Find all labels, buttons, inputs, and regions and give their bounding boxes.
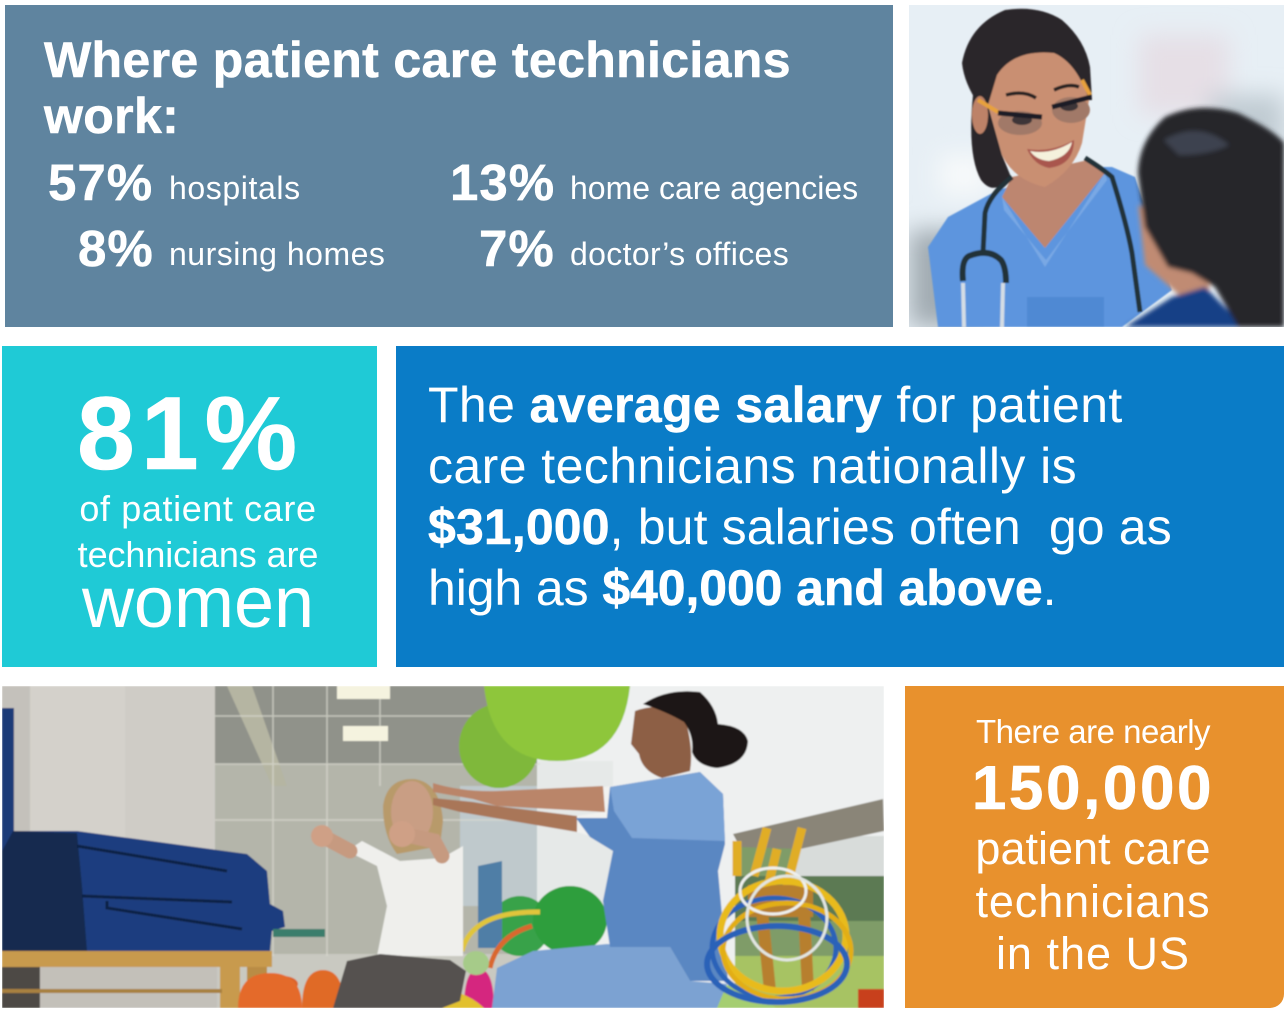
- caption: of patient care: [79, 488, 317, 529]
- stat: home care agencies: home care agencies: [570, 170, 858, 206]
- stat: doctors offices: doctor’s offices: [570, 236, 789, 272]
- caption: technicians are: [78, 534, 318, 575]
- stat: doctors offices: 7%: [479, 220, 555, 277]
- caption: patient care: [975, 823, 1211, 874]
- big number: 150,000: [972, 754, 1214, 823]
- room background: [2, 686, 884, 1008]
- heading: [44, 32, 791, 144]
- stat: nursing homes: nursing homes: [169, 236, 385, 272]
- window and landscape: [733, 799, 884, 1008]
- salary text: care technicians nationally is: [428, 438, 1077, 494]
- caption: [78, 488, 318, 575]
- heading: work:: [44, 88, 179, 144]
- salary text: $31,000, but salaries often go as: [428, 499, 1172, 555]
- stat: home care agencies: 13%: [450, 154, 555, 211]
- orange, yellow and pink balls: [238, 951, 884, 1008]
- heading: Where patient care technicians: [44, 32, 791, 88]
- salary text: The average salary for patient: [428, 377, 1123, 433]
- panel: where technicians work: [5, 5, 893, 327]
- salary text: high as $40,000 and above.: [428, 560, 1056, 616]
- caption: technicians: [975, 876, 1211, 926]
- intro line: There are nearly: [976, 713, 1210, 750]
- stacked blue mats on bench: [2, 708, 325, 1008]
- stat: hospitals: 57%: [48, 154, 153, 211]
- panel: 81 percent women: [2, 346, 377, 667]
- panel: 150,000 technicians: [905, 686, 1284, 1008]
- nurse: [928, 9, 1172, 327]
- panel: average salary: [396, 346, 1284, 667]
- caption: in the US: [996, 928, 1190, 979]
- stat: home care agencies: [450, 154, 858, 211]
- stat: nursing homes: 8%: [78, 220, 154, 277]
- photo: smiling technician: [909, 5, 1284, 327]
- photo: therapy session: [2, 686, 884, 1008]
- salary text: [428, 377, 1172, 616]
- stat: nursing homes: [78, 220, 385, 277]
- patient from behind: [1125, 108, 1284, 327]
- stat: hospitals: hospitals: [169, 170, 301, 206]
- big number: 81%: [77, 376, 303, 492]
- word women: women: [82, 563, 314, 643]
- older woman exercising: [311, 779, 466, 1008]
- stool and hoops: [707, 828, 851, 1002]
- green exercise balls: [459, 686, 630, 968]
- stat: hospitals: [48, 154, 301, 211]
- caption: [975, 823, 1211, 979]
- stat: doctors offices: [479, 220, 789, 277]
- nurse exercising: [433, 691, 748, 1008]
